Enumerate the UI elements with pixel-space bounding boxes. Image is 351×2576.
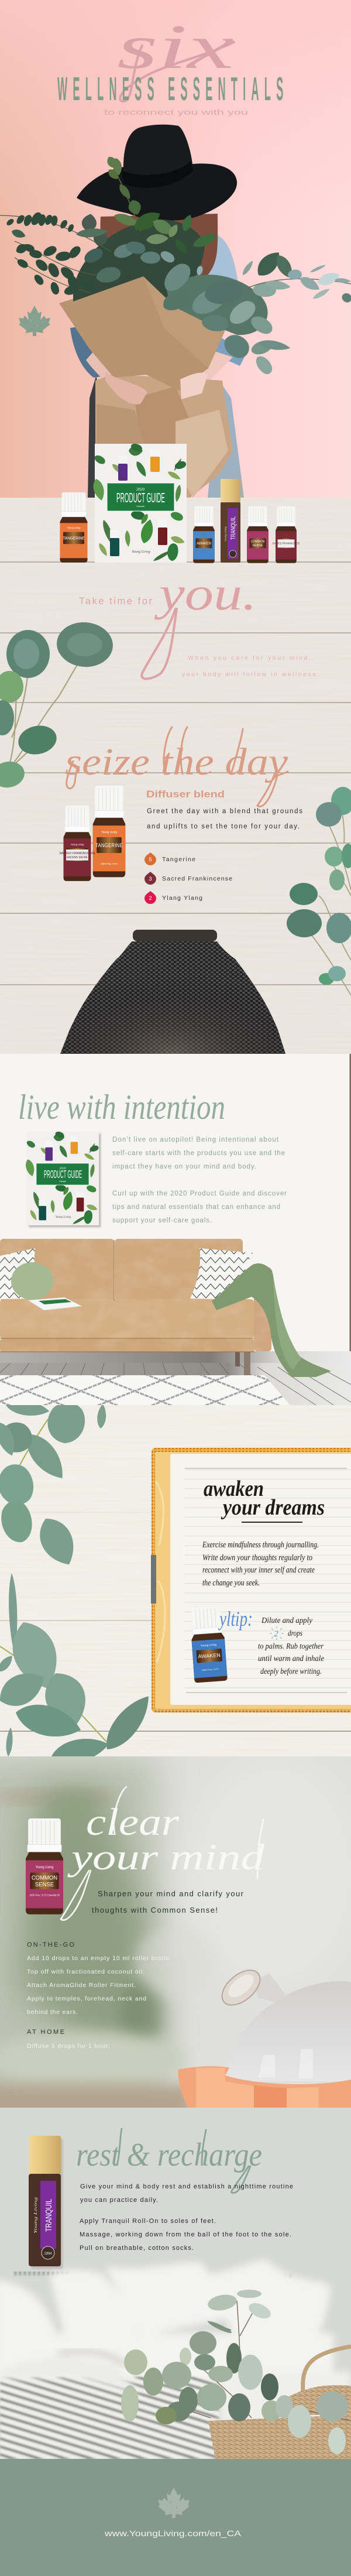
flourish: you tail xyxy=(142,609,177,679)
tip text: Dilute and apply xyxy=(261,1616,313,1625)
book: product guide small: Canada xyxy=(59,1180,66,1183)
text: journalling: Write down your thoughts regularly to xyxy=(202,1553,312,1563)
blurred background xyxy=(0,1756,351,2125)
bottle: common sense: COMMON xyxy=(251,540,264,544)
bottle: tranquil roller large: Young Living xyxy=(33,2197,38,2234)
bottle: awaken xyxy=(193,506,215,563)
magazine on sofa xyxy=(28,1297,82,1310)
bottle: awaken tilted: Young Living xyxy=(201,1643,217,1647)
heading: take time for: Take time for xyxy=(79,596,152,607)
glass diffuser xyxy=(178,1964,351,2108)
bottle: tranquil roller large: 1994 xyxy=(44,2252,52,2256)
text: rest routine: Apply Tranquil Roll-On to soles of feet. xyxy=(80,2218,216,2225)
text: live with intention body: Don’t live on autopilot! Being intentional about xyxy=(112,1136,279,1143)
text: when you care xyxy=(182,655,319,678)
bottle: awaken tilted: AWAKEN xyxy=(198,1652,221,1659)
text: greet the day: Greet the day with a blend that grounds xyxy=(147,808,302,815)
eucalyptus branch xyxy=(0,1398,158,1767)
bottle: common sense: 100% Pure, YLTG Essential Oil xyxy=(29,1893,60,1897)
bottle: tangerine xyxy=(60,492,88,563)
drop list: recipe: 3 xyxy=(149,876,152,882)
bottle: common sense: SENSE xyxy=(253,544,263,547)
diffuser: black mesh dome xyxy=(60,930,285,1054)
panel: footer xyxy=(0,2459,351,2576)
text: rest routine xyxy=(80,2183,293,2252)
book: product guide xyxy=(91,442,187,563)
rug xyxy=(0,1375,292,1405)
bottle: sacred frankincense large: ENCENS SACRÉ xyxy=(67,855,88,859)
text: journalling: the change you seek. xyxy=(202,1578,260,1588)
text: on-the-go: Top off with fractionated coconut oil. xyxy=(27,1968,144,1975)
text: at home xyxy=(27,2029,110,2050)
notebook xyxy=(151,1448,351,1712)
text: live with intention body: support your self-care goals. xyxy=(112,1217,212,1224)
heading: rest and recharge: rest & recharge xyxy=(76,2137,262,2173)
logo: maple leaf: Y xyxy=(30,319,33,323)
text: journalling xyxy=(202,1540,319,1588)
heading: awaken your dreams: your dreams xyxy=(221,1495,325,1520)
flourish: seize the day tails xyxy=(67,727,288,806)
text: sharpen your mind: thoughts with Common Sense! xyxy=(92,1906,218,1914)
drop list: recipe: Ylang Ylang xyxy=(162,895,202,902)
drop list: recipe: 5 xyxy=(149,857,152,863)
bottle: sacred frankincense large xyxy=(59,806,95,881)
blurred bed xyxy=(0,2260,351,2459)
heading: live with intention: live with intention xyxy=(18,1088,225,1126)
drop list: recipe xyxy=(144,852,232,904)
website url: www.YoungLiving.com/en_CA xyxy=(104,2529,242,2538)
flourish: clear your mind tails xyxy=(61,1787,263,1920)
book: product guide small: Young Living xyxy=(56,1216,71,1219)
text: journalling: reconnect with your inner self and create xyxy=(202,1566,315,1575)
heading: your mind: your mind xyxy=(67,1838,265,1878)
flourish: recharge tails xyxy=(117,2129,250,2193)
bottle: tangerine: TANGERINE xyxy=(63,536,85,541)
tip text: to palms. Rub together xyxy=(258,1642,324,1651)
wooden bowl xyxy=(178,2066,351,2108)
bottle: awaken tilted: 100% Pure, YLTG xyxy=(202,1668,219,1671)
text: on-the-go: Attach AromaGlide Roller Fitment. xyxy=(27,1982,136,1989)
book: product guide: Young Living xyxy=(132,550,150,554)
bottle: tranquil roller xyxy=(221,479,240,563)
panel: live with intention xyxy=(0,1054,351,1405)
logo: maple leaf: L xyxy=(176,2506,178,2510)
text: live with intention body: impact they have on your mind and body. xyxy=(112,1163,256,1170)
basket xyxy=(208,2347,351,2459)
book: product guide small: PRODUCT GUIDE xyxy=(44,1169,82,1180)
bottle: tranquil roller large: TRANQUIL xyxy=(44,2199,54,2232)
text: rest routine: Give your mind & body rest and establish a nighttime routine xyxy=(80,2183,293,2190)
underline stroke xyxy=(242,1522,302,1523)
bottle: sacred frankincense xyxy=(273,506,300,563)
flourish: six long tail xyxy=(120,42,234,101)
book: product guide small xyxy=(24,1131,101,1227)
book: product guide small: 2020 xyxy=(60,1167,66,1170)
text: live with intention body: tips and natural essentials that can enhance and xyxy=(112,1204,280,1211)
text: journalling: Exercise mindfulness through journalling. xyxy=(202,1540,319,1550)
text: live with intention body xyxy=(112,1136,287,1224)
icon: number 2 with rays: 2 xyxy=(274,1629,278,1639)
text: when you care: your body will follow in wellness. xyxy=(182,671,319,678)
blanket xyxy=(212,1263,331,1377)
bottle: sacred frankincense: SACRED FRANKINCENSE xyxy=(273,542,300,545)
text: on-the-go xyxy=(27,1941,171,2016)
shelf: product guide and bottles row xyxy=(60,442,300,563)
text: sharpen your mind xyxy=(92,1889,244,1914)
text: on-the-go: ON-THE-GO xyxy=(27,1941,74,1948)
text: at home: Diffuse 5 drops for 1 hour. xyxy=(27,2043,110,2050)
title: wellness essentials: WELLNESS ESSENTIALS xyxy=(57,70,289,107)
text: greet the day: and uplifts to set the tone for your day. xyxy=(147,823,300,830)
heading: seize the day: seize the day xyxy=(65,741,288,783)
pillow: round green xyxy=(11,1262,53,1300)
book: product guide: Canada xyxy=(136,505,145,508)
heading: clear: clear xyxy=(86,1801,179,1844)
panel: clear your mind xyxy=(0,1756,351,2125)
bottle: tangerine: Young Living xyxy=(67,526,81,529)
bottle: common sense: COMMON xyxy=(32,1875,57,1881)
illustration: right watercolor leaves xyxy=(287,787,351,995)
bottle: common sense xyxy=(247,506,269,563)
bottle: sacred frankincense large: Young Living xyxy=(71,843,84,846)
book: product guide: PRODUCT GUIDE xyxy=(116,490,165,505)
label: yltip: yltip: xyxy=(218,1607,253,1630)
logo: maple leaf: Y xyxy=(169,2501,172,2505)
drop list: recipe: 2 xyxy=(149,895,152,902)
pillow: left chevron xyxy=(0,1248,36,1299)
text: sharpen your mind: Sharpen your mind and clarify your xyxy=(98,1889,244,1898)
text: on-the-go: Apply to temples, forehead, neck and xyxy=(27,1995,146,2002)
bottle: awaken tilted xyxy=(190,1606,228,1683)
drop list: recipe: Sacred Frankincense xyxy=(162,875,232,882)
bottle: common sense: SENSE xyxy=(35,1882,54,1888)
heading: you: you. xyxy=(154,567,257,620)
bottle: common sense: Young Living xyxy=(36,1866,53,1869)
illustration: left watercolor leaves xyxy=(0,620,115,790)
logo: maple leaf: L xyxy=(37,324,39,328)
logo: maple leaf xyxy=(19,306,50,336)
logo: maple leaf xyxy=(158,2488,190,2518)
eucalyptus in basket xyxy=(121,2290,351,2454)
figure: woman in hat holding a bouquet xyxy=(59,125,247,498)
heading: awaken your dreams: awaken xyxy=(204,1477,264,1501)
panel: awaken your dreams xyxy=(0,1398,351,1767)
bottle: tangerine large: TANGERINE xyxy=(95,842,123,848)
tip text: until warm and inhale xyxy=(258,1654,324,1663)
pillow: right chevron xyxy=(190,1248,243,1299)
tip text: deeply before writing. xyxy=(260,1667,322,1676)
bottle: awaken: AWAKEN xyxy=(197,542,211,546)
text: greet the day xyxy=(147,808,302,830)
text: on-the-go: Add 10 drops to an empty 10 ml roller bottle. xyxy=(27,1955,171,1962)
tip text xyxy=(258,1616,324,1676)
subheading: diffuser blend: Diffuser blend xyxy=(146,789,225,800)
bottle: tranquil roller: Young Living xyxy=(224,526,227,542)
book: product guide: 2020 xyxy=(136,487,145,492)
text: rest routine: you can practice daily. xyxy=(80,2197,158,2204)
tip text: drops xyxy=(288,1629,302,1638)
text: when you care: When you care for your mind, xyxy=(188,655,311,662)
title: six: six xyxy=(117,12,234,82)
text: rest routine: Pull on breathable, cotton socks. xyxy=(80,2245,194,2252)
subtitle: to reconnect you with you xyxy=(104,108,248,117)
bottle: common sense xyxy=(26,1818,63,1914)
bottle: tranquil roller: TRANQUIL xyxy=(230,516,237,540)
text: rest routine: Massage, working down from the ball of the foot to the sole. xyxy=(80,2231,291,2238)
panel: wood plank background xyxy=(0,498,351,1054)
text: live with intention body: self-care starts with the products you use and the xyxy=(112,1150,285,1157)
text: at home: AT HOME xyxy=(27,2029,64,2036)
icon: number 2 with rays xyxy=(270,1626,284,1640)
bottle: tranquil roller large xyxy=(29,2136,63,2269)
heading: awaken your dreams xyxy=(204,1477,325,1520)
panel: rest and recharge xyxy=(0,2108,351,2459)
panel: hero pink background xyxy=(0,0,351,498)
bouquet foliage xyxy=(0,155,351,377)
bottle: tangerine large: Young Living xyxy=(101,831,117,834)
sofa xyxy=(0,1239,271,1375)
bottle: tangerine large: 100% Pure, YLTG xyxy=(101,862,118,865)
bottle: tangerine large xyxy=(93,786,125,877)
text: on-the-go: behind the ears. xyxy=(27,2009,78,2016)
bottle: sacred frankincense large: SACRED FRANKINCENSE xyxy=(59,852,95,855)
drop list: recipe: Tangerine xyxy=(162,856,195,863)
text: live with intention body: Curl up with the 2020 Product Guide and discover xyxy=(112,1190,287,1197)
